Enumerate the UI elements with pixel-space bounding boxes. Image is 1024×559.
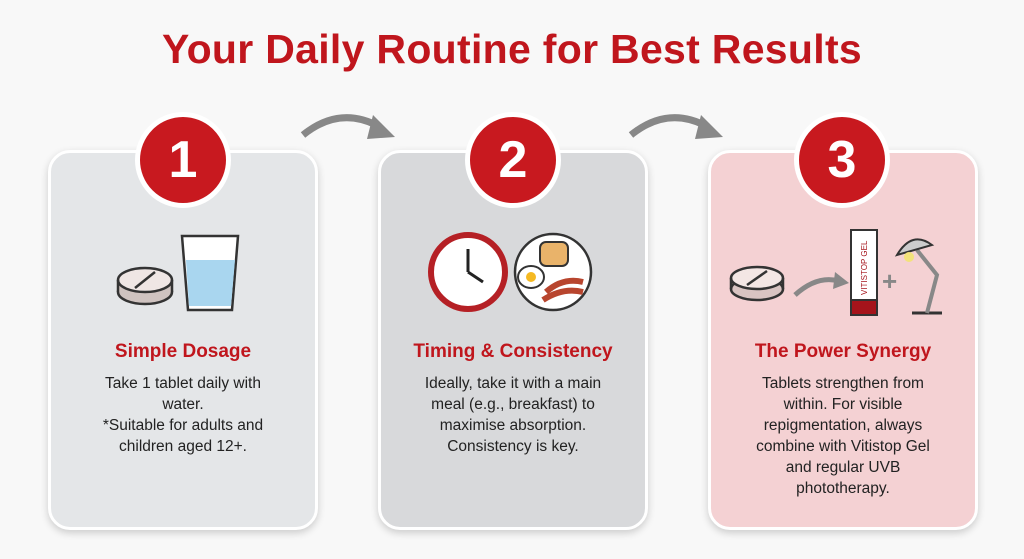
icon: clock and breakfast (428, 232, 592, 312)
panel: step 3 (708, 150, 978, 530)
heading 3: The Power Synergy (755, 341, 931, 362)
text 3: within. For visible (784, 396, 902, 413)
text 2: Consistency is key. (447, 438, 579, 455)
panel: step 1 (48, 150, 318, 530)
number 3 (794, 112, 890, 208)
number 1 (135, 112, 231, 208)
number 2 (465, 112, 561, 208)
arrow 2 (628, 114, 723, 139)
icon: tablet, gel and lamp: + (882, 266, 897, 296)
text 3: and regular UVB (786, 459, 900, 476)
text 1 (103, 375, 263, 455)
icon: tablet, gel and lamp: VITISTOP GEL (860, 240, 869, 295)
icon: tablet, gel and lamp (730, 229, 942, 316)
text 2: maximise absorption. (440, 417, 586, 434)
text 2: Ideally, take it with a main (425, 375, 601, 392)
text 3: phototherapy. (796, 480, 890, 497)
text 1: Take 1 tablet daily with (105, 375, 261, 392)
number 1: 1 (169, 131, 197, 189)
number 2: 2 (499, 131, 527, 189)
text 1: children aged 12+. (119, 438, 247, 455)
panel: step 2 (378, 150, 648, 530)
icon: tablet and glass (116, 234, 240, 312)
arrow 1 (300, 114, 395, 139)
text 2 (425, 375, 601, 455)
text 3 (756, 375, 930, 497)
number 3: 3 (828, 131, 856, 189)
text 3: combine with Vitistop Gel (756, 438, 930, 455)
heading 1: Simple Dosage (115, 341, 251, 362)
heading 2: Timing & Consistency (413, 341, 613, 362)
text 1: *Suitable for adults and (103, 417, 263, 434)
text 2: meal (e.g., breakfast) to (431, 396, 595, 413)
text 3: Tablets strengthen from (762, 375, 924, 392)
title: Your Daily Routine for Best Results (162, 26, 862, 72)
text 1: water. (162, 396, 204, 413)
text 3: repigmentation, always (764, 417, 922, 434)
